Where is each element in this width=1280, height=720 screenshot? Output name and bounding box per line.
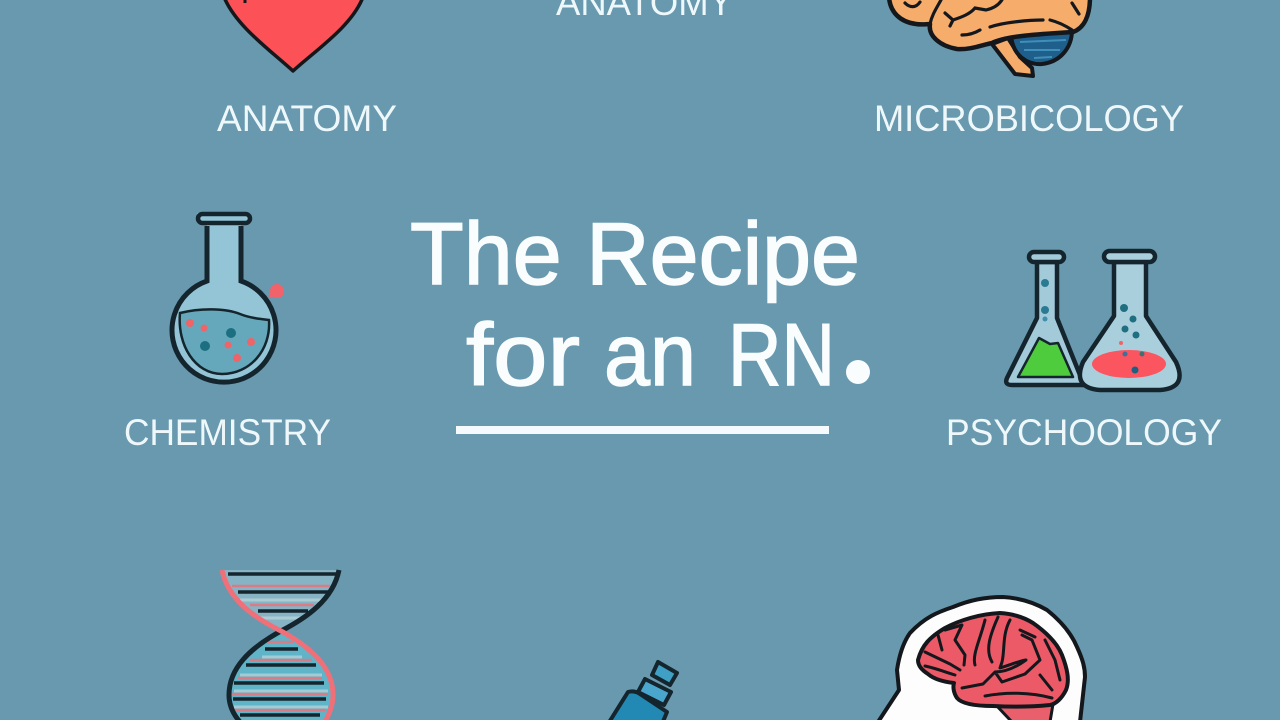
right flask xyxy=(1080,251,1180,390)
label: anatomy left: ANATOMY xyxy=(217,98,397,139)
title: . xyxy=(847,300,871,399)
cerebellum xyxy=(995,704,1053,720)
label: microbicology: MICROBICOLOGY xyxy=(874,98,1184,139)
icon: two flasks xyxy=(1006,251,1180,390)
icon: head with red brain xyxy=(878,597,1085,720)
title: for xyxy=(466,305,580,404)
title: an xyxy=(604,305,696,404)
icon: medicine bottle xyxy=(608,662,677,720)
icon: dna helix xyxy=(222,570,339,720)
title: RN xyxy=(728,305,835,404)
icon: orange brain xyxy=(889,0,1090,76)
label: psychoology: PSYCHOOLOGY xyxy=(946,412,1222,453)
left flask xyxy=(1006,252,1084,385)
title underline xyxy=(456,426,829,434)
label: chemistry: CHEMISTRY xyxy=(124,412,331,453)
icon: heart xyxy=(224,0,363,71)
title xyxy=(410,204,871,404)
icon: round flask xyxy=(172,213,284,382)
red brain xyxy=(918,613,1068,707)
head silhouette xyxy=(878,597,1085,720)
title: The Recipe xyxy=(410,204,860,303)
